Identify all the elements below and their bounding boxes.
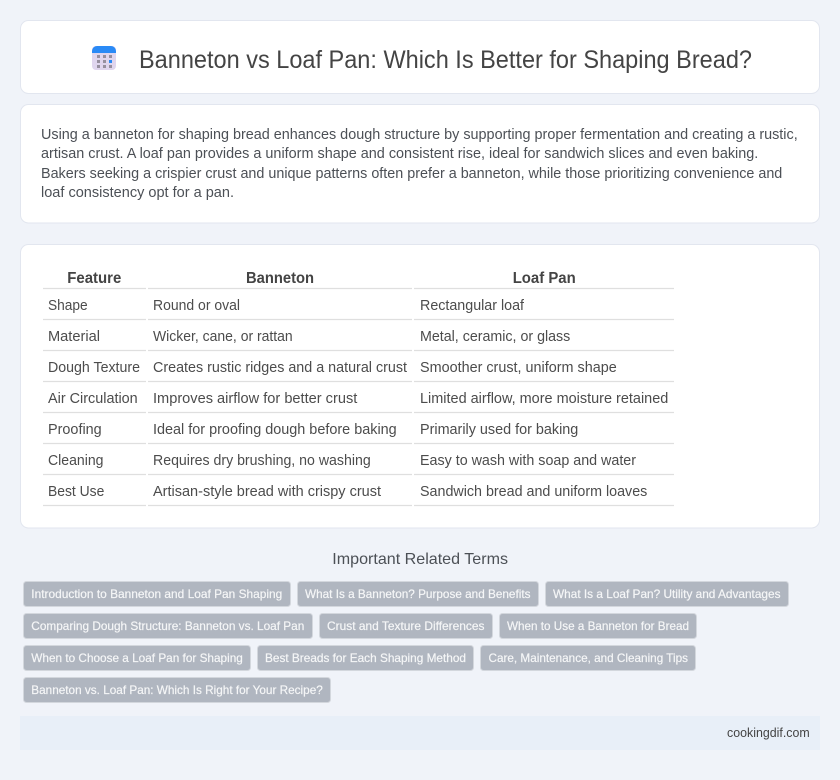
table row: proofing: Ideal for proofing dough before baking bbox=[153, 422, 397, 438]
panel: related term tags bbox=[24, 582, 788, 702]
tag: Banneton vs. Loaf Pan: Which Is Right for Your Recipe? bbox=[31, 683, 323, 697]
table row: best use: Artisan-style bread with crispy crust bbox=[153, 484, 381, 500]
panel: intro paragraph bbox=[20, 104, 820, 223]
text block: intro: artisan crust. A loaf pan provides a uniform shape and consistent rise, ideal for sandwich slices and even baking. bbox=[41, 146, 758, 162]
table row: cleaning: Requires dry brushing, no washing bbox=[153, 453, 371, 469]
table row: dough texture: Dough Texture bbox=[48, 360, 140, 376]
table header: Banneton bbox=[246, 270, 314, 287]
text block: intro: Using a banneton for shaping bread enhances dough structure by supporting proper fermentation and creating a rustic, bbox=[41, 127, 798, 143]
table header: Feature bbox=[67, 270, 121, 287]
tag: Comparing Dough Structure: Banneton vs. Loaf Pan bbox=[31, 619, 304, 633]
tag: What Is a Loaf Pan? Utility and Advantages bbox=[553, 587, 780, 601]
table row: shape: Shape bbox=[48, 298, 88, 314]
table row: material: Wicker, cane, or rattan bbox=[153, 329, 293, 345]
tag bbox=[24, 614, 312, 638]
footer text: site name: cookingdif.com bbox=[727, 725, 810, 740]
table row: cleaning: Cleaning bbox=[48, 453, 104, 469]
table row: air circulation: Air Circulation bbox=[48, 391, 138, 407]
tag: When to Choose a Loaf Pan for Shaping bbox=[31, 651, 243, 665]
table row: air circulation bbox=[48, 391, 668, 407]
tag bbox=[480, 646, 696, 670]
table row: dough texture: Creates rustic ridges and a natural crust bbox=[153, 360, 407, 376]
table row: best use: Best Use bbox=[48, 484, 104, 500]
icon: calendar bbox=[92, 46, 116, 70]
tag bbox=[500, 614, 696, 638]
table row: proofing: Primarily used for baking bbox=[420, 422, 578, 438]
table row: shape: Round or oval bbox=[153, 298, 240, 314]
table row: shape bbox=[48, 298, 525, 314]
table row: cleaning: Easy to wash with soap and water bbox=[420, 453, 636, 469]
table header bbox=[67, 270, 576, 287]
table row: material: Metal, ceramic, or glass bbox=[420, 329, 570, 345]
tag: Care, Maintenance, and Cleaning Tips bbox=[488, 651, 688, 665]
table row: cleaning bbox=[48, 453, 636, 469]
tag: What Is a Banneton? Purpose and Benefits bbox=[305, 587, 530, 601]
title: Banneton vs Loaf Pan: Which Is Better for Shaping Bread? bbox=[139, 46, 752, 74]
tag: Introduction to Banneton and Loaf Pan Shaping bbox=[31, 587, 282, 601]
tag bbox=[320, 614, 492, 638]
tag: Best Breads for Each Shaping Method bbox=[265, 651, 466, 665]
table header: Loaf Pan bbox=[513, 270, 576, 287]
tag bbox=[258, 646, 474, 670]
table row: dough texture: Smoother crust, uniform shape bbox=[420, 360, 617, 376]
panel: comparison table bbox=[20, 244, 820, 528]
text block: intro: loaf consistency opt for a pan. bbox=[41, 185, 234, 201]
table row: material: Material bbox=[48, 329, 100, 345]
tag: Crust and Texture Differences bbox=[327, 619, 484, 633]
table row: air circulation: Limited airflow, more moisture retained bbox=[420, 391, 668, 407]
table row: best use bbox=[48, 484, 647, 500]
table row: best use: Sandwich bread and uniform loaves bbox=[420, 484, 647, 500]
table row: shape: Rectangular loaf bbox=[420, 298, 525, 314]
tag bbox=[298, 582, 538, 606]
text block: intro: Bakers seeking a crispier crust and unique patterns often prefer a banneton, while those prioritizing convenience and bbox=[41, 166, 782, 182]
table row: dough texture bbox=[48, 360, 617, 376]
tag: When to Use a Banneton for Bread bbox=[507, 619, 689, 633]
heading: important related terms: Important Related Terms bbox=[332, 551, 508, 568]
text block: intro bbox=[41, 127, 798, 201]
table row: proofing: Proofing bbox=[48, 422, 102, 438]
panel: title header bbox=[20, 20, 820, 94]
table row: material bbox=[48, 329, 570, 345]
footer bbox=[20, 716, 820, 750]
tag bbox=[24, 582, 290, 606]
tag bbox=[546, 582, 788, 606]
table row: proofing bbox=[48, 422, 578, 438]
tag bbox=[24, 678, 330, 702]
table row: air circulation: Improves airflow for better crust bbox=[153, 391, 357, 407]
tag bbox=[24, 646, 250, 670]
